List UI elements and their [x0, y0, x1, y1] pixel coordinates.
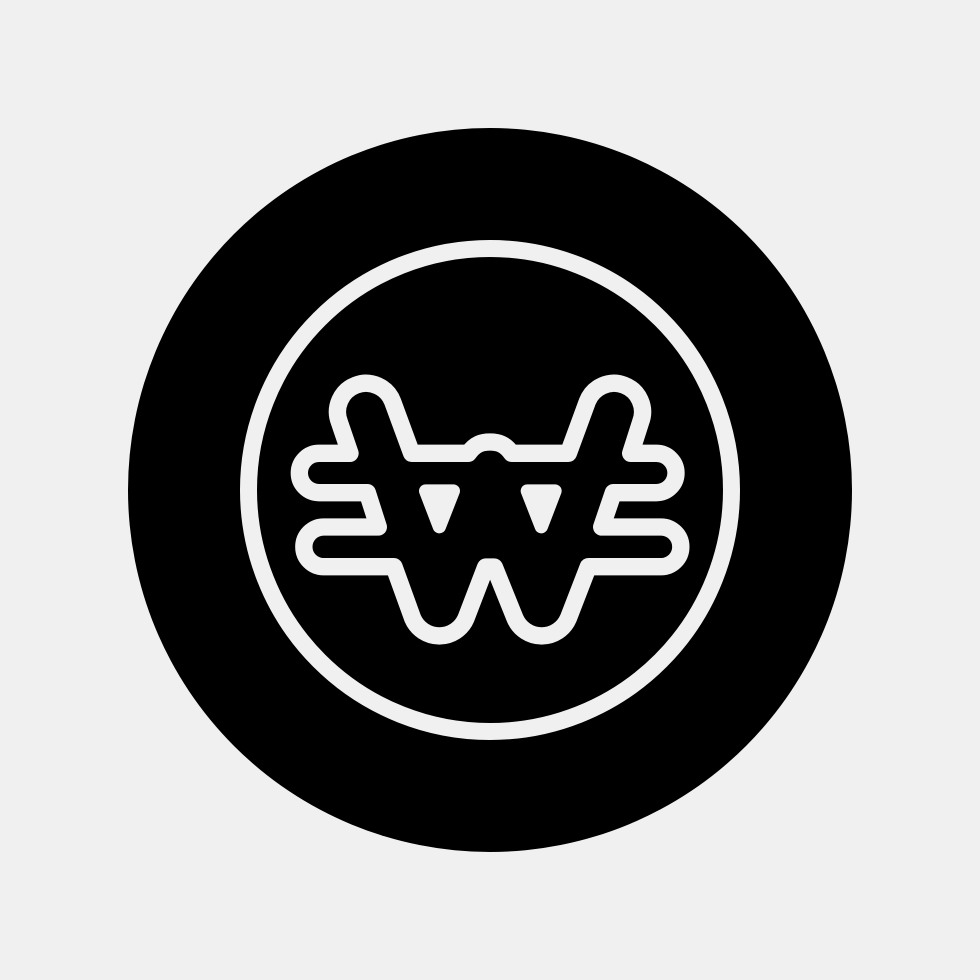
right triangle — [527, 491, 555, 527]
coin: black disc — [128, 128, 852, 852]
won symbol outline — [299, 383, 681, 636]
icon: won symbol — [299, 383, 681, 636]
coin: inner ring — [248, 248, 732, 732]
left triangle — [426, 491, 453, 527]
